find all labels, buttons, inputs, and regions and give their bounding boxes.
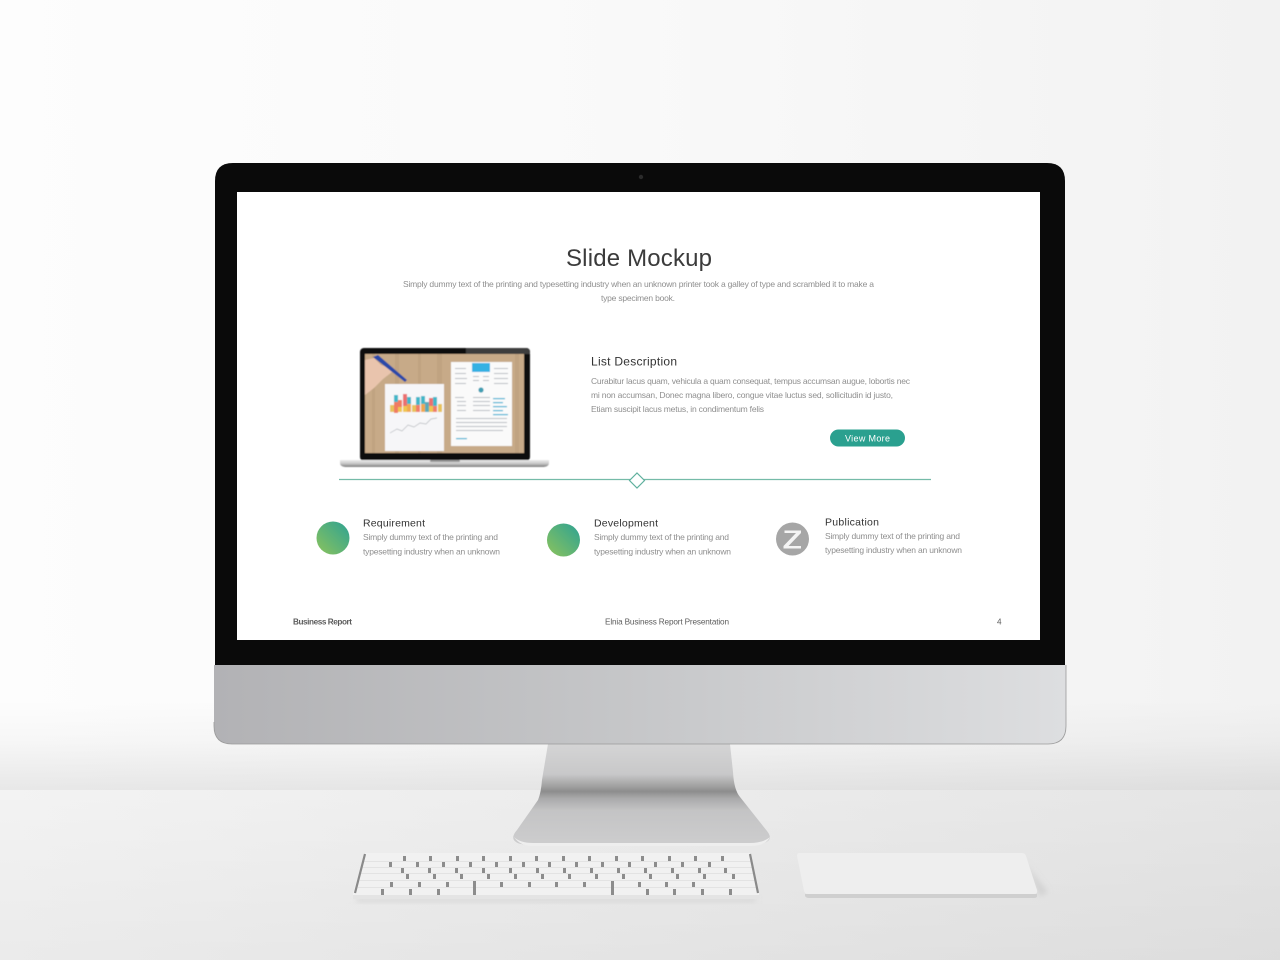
development text [594, 532, 731, 556]
line chart [390, 418, 437, 433]
slide content [293, 245, 1002, 626]
hand [365, 358, 392, 395]
document teal lines [456, 398, 508, 439]
view more button [830, 430, 905, 446]
paper: chart [385, 384, 444, 451]
laptop lid [360, 348, 530, 461]
list description [591, 354, 911, 414]
wood grain [372, 354, 519, 453]
publication text [825, 531, 962, 555]
list body [591, 376, 911, 414]
list body: Etiam suscipit lacus metus, in condimentum felis [591, 404, 764, 414]
monitor stand [513, 744, 770, 846]
pen [373, 355, 407, 382]
desk lower shade [0, 790, 1280, 960]
bar chart [390, 394, 442, 413]
requirement text: typesetting industry when an unknown [363, 546, 500, 556]
subtitle: Simply dummy text of the printing and typesetting industry when an unknown printer took a galley of type and scrambled it to make a [403, 279, 874, 289]
chin outline [214, 665, 1066, 744]
keyboard [353, 853, 759, 902]
keyboard row lines [358, 862, 757, 888]
list body: Curabitur lacus quam, vehicula a quam consequat, tempus accumsan augue, lobortis nec [591, 376, 911, 386]
list body: mi non accumsan, Donec magna libero, congue vitae luctus sed, sollicitudin id justo, [591, 390, 893, 400]
icon: publication badge [776, 522, 809, 556]
stand foot edge [514, 837, 770, 846]
stand neck and foot [513, 744, 770, 845]
footer center: Elnia Business Report Presentation [605, 618, 729, 626]
requirement heading: Requirement [363, 518, 425, 530]
document badge [478, 387, 484, 393]
view more button: View More [845, 434, 890, 444]
keyboard side edges [355, 854, 758, 893]
photo wood background [365, 354, 524, 453]
slide footer [293, 618, 1002, 626]
development text: typesetting industry when an unknown [594, 546, 731, 556]
publication heading: Publication [825, 516, 879, 528]
subtitle [403, 279, 874, 303]
icon: requirement circle [316, 521, 350, 555]
footer left: Business Report [293, 618, 352, 626]
paper: document [451, 362, 512, 446]
wall shadow near desk [0, 700, 1280, 790]
document header [472, 363, 490, 372]
monitor [214, 163, 1066, 744]
desk surface [0, 790, 1280, 960]
trackpad side shadow [1024, 862, 1048, 897]
requirement text [363, 532, 500, 556]
development heading: Development [594, 518, 658, 530]
keyboard body [353, 853, 759, 899]
feature: development [547, 518, 731, 556]
webcam [639, 175, 643, 179]
document text lines [455, 368, 508, 431]
icon: development circle [547, 524, 580, 556]
publication text: Simply dummy text of the printing and [825, 531, 960, 541]
trackpad top [797, 853, 1037, 894]
divider with diamond [339, 473, 931, 488]
keyboard front edge [353, 895, 759, 899]
laptop base [340, 460, 549, 467]
trackpad front edge [805, 894, 1037, 898]
trackpad [797, 853, 1048, 898]
keyboard shadow [356, 898, 756, 902]
laptop notch [430, 460, 460, 462]
feature: publication [776, 516, 962, 556]
feature: requirement [316, 518, 500, 556]
list heading: List Description [591, 354, 677, 368]
screen [237, 192, 1040, 640]
monitor bezel [215, 163, 1065, 665]
requirement text: Simply dummy text of the printing and [363, 532, 498, 542]
page number: 4 [997, 618, 1002, 626]
document sheet [451, 362, 512, 446]
monitor chin [214, 665, 1066, 744]
development text: Simply dummy text of the printing and [594, 532, 729, 542]
publication text: typesetting industry when an unknown [825, 545, 962, 555]
title: Slide Mockup [566, 245, 712, 272]
key gaps [381, 856, 735, 895]
chart sheet [385, 384, 444, 451]
subtitle: type specimen book. [601, 293, 675, 303]
lid upper right tone [466, 348, 530, 354]
laptop image [340, 348, 549, 467]
